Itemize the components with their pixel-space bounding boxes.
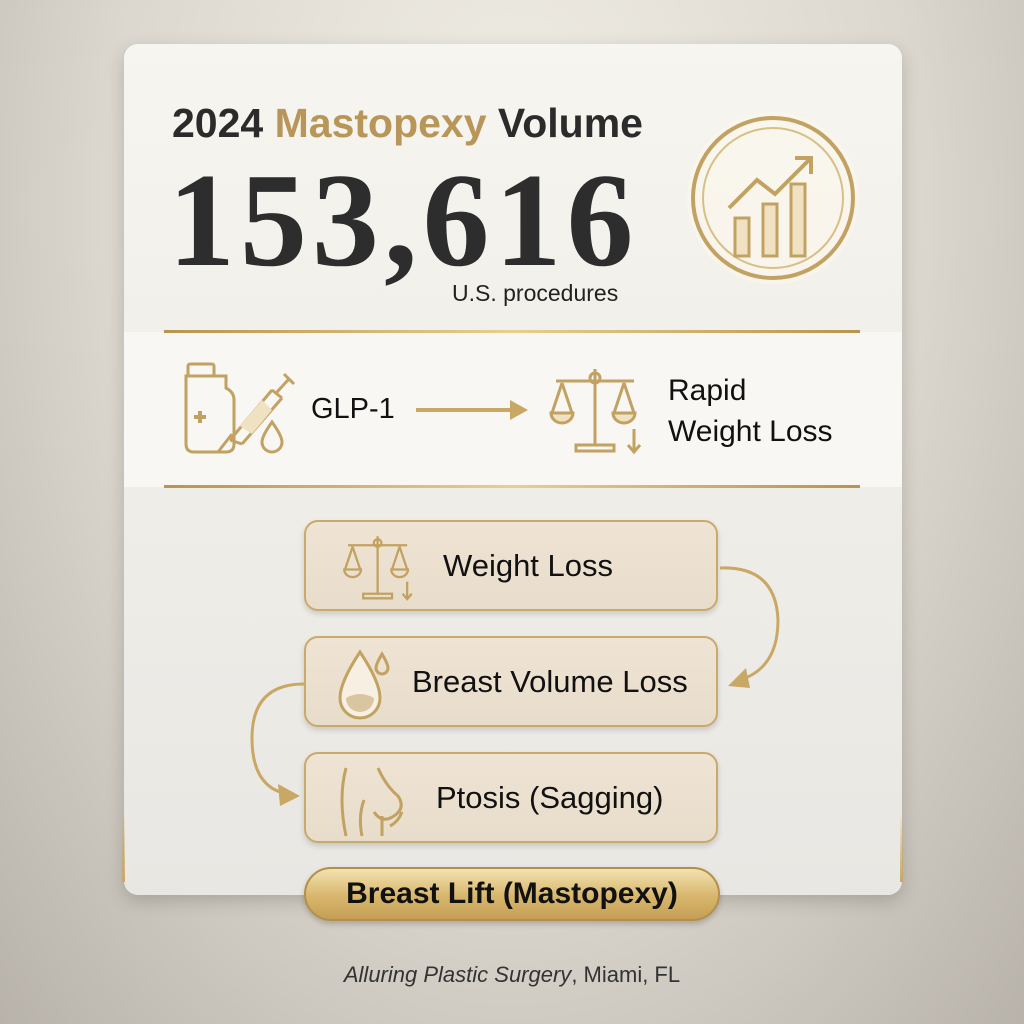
- step: Ptosis: Ptosis (Sagging): [436, 780, 663, 815]
- arrow: right curve: [720, 566, 780, 688]
- button: Breast Lift: Breast Lift (Mastopexy): [346, 877, 678, 910]
- icon: scale: [550, 369, 641, 454]
- title: 2024 Mastopexy Volume: [172, 100, 643, 146]
- icon: vial and syringe: [184, 362, 295, 454]
- step: Weight Loss: [304, 520, 718, 611]
- card gold side edges: [122, 812, 125, 882]
- step: Ptosis: [304, 752, 718, 843]
- step: Breast Volume Loss: [304, 636, 718, 727]
- text: Rapid Weight Loss: Rapid: [668, 374, 746, 407]
- text: Rapid Weight Loss: [668, 374, 833, 448]
- footer: Alluring Plastic Surgery, Miami, FL: [344, 962, 680, 987]
- text: Rapid Weight Loss: Weight Loss: [668, 415, 833, 448]
- text: GLP-1: GLP-1: [311, 393, 395, 425]
- icon: growth chart circle: [691, 116, 855, 280]
- card: [124, 44, 902, 895]
- step: Breast Volume Loss: Breast Volume Loss: [412, 664, 688, 699]
- arrow: [416, 400, 528, 420]
- step: Weight Loss: Weight Loss: [443, 548, 613, 583]
- big number: 153,616: [168, 146, 638, 294]
- band: GLP-1 row: [124, 332, 902, 487]
- arrow: left curve: [250, 682, 304, 806]
- subtitle: U.S. procedures: [452, 280, 618, 306]
- button: Breast Lift: [304, 867, 720, 921]
